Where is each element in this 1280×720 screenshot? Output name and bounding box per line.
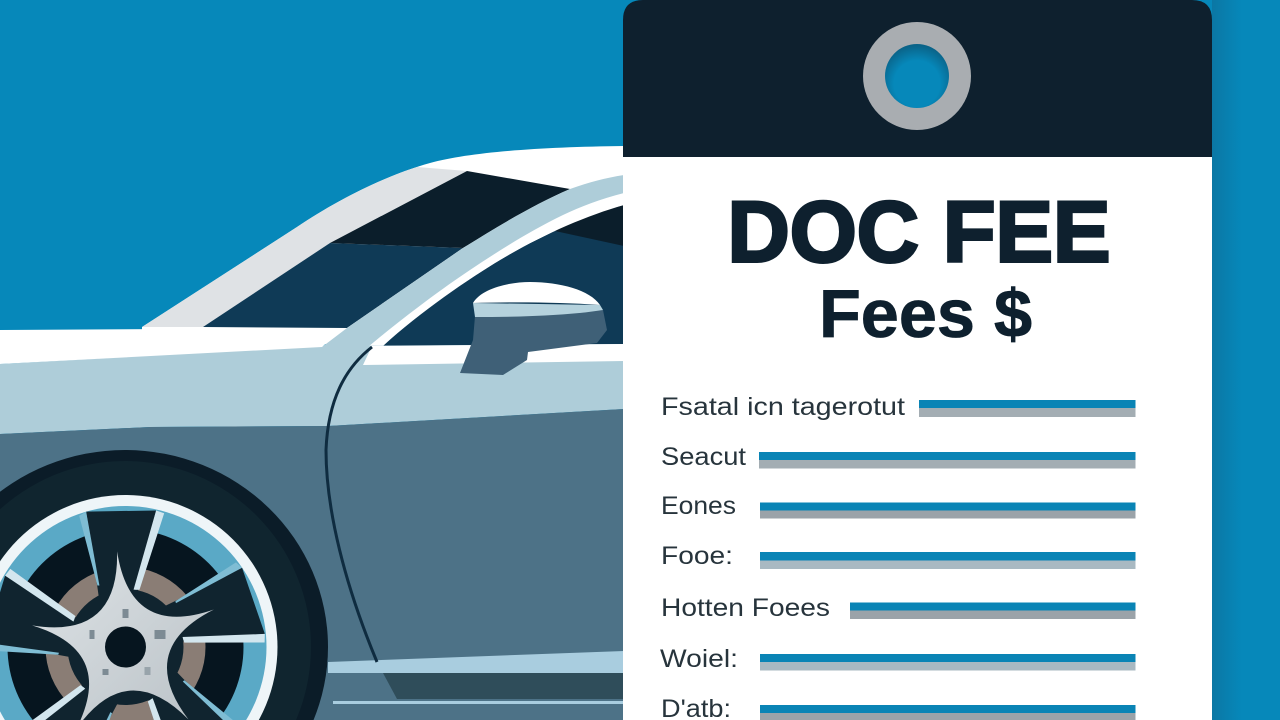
brake disc: [46, 567, 206, 720]
fee row 4: Fooe:: [661, 542, 733, 570]
fee row 4: [661, 542, 1136, 570]
fee row 1: [661, 393, 1136, 421]
side window: [375, 205, 624, 346]
lower trim: [328, 651, 624, 704]
grommet: [863, 22, 971, 130]
body panels: [0, 328, 624, 720]
fee row 5: [661, 594, 1136, 622]
fee row 5: Hotten Foees: [661, 594, 830, 622]
rim: [0, 495, 278, 720]
silver star hub: [32, 551, 214, 720]
subheading: Fees $: Fees $: [819, 276, 1032, 352]
fee row 2: [661, 443, 1136, 471]
fee row 7: [661, 695, 1136, 720]
car illustration: [0, 146, 624, 720]
heading: DOC FEE: DOC FEE: [728, 184, 1110, 280]
tag body: [623, 140, 1212, 720]
tag shadow: [1212, 0, 1242, 720]
windshield: [203, 171, 570, 328]
fee row 6: Woiel:: [660, 645, 738, 673]
fee row 1: Fsatal icn tagerotut: [661, 393, 905, 421]
fee row 6: [660, 645, 1136, 673]
spokes: [0, 510, 267, 720]
tag header: [623, 0, 1212, 157]
wheel: [0, 450, 328, 720]
roof and pillar: [142, 146, 624, 344]
A pillar: [322, 175, 624, 347]
fee row 3: Eones: [661, 492, 736, 520]
fee row 2: Seacut: [661, 443, 746, 471]
price tag: [623, 0, 1212, 720]
door seam: [326, 347, 377, 662]
side mirror: [460, 282, 607, 375]
fee row 3: [661, 492, 1136, 520]
tire: [0, 450, 328, 720]
